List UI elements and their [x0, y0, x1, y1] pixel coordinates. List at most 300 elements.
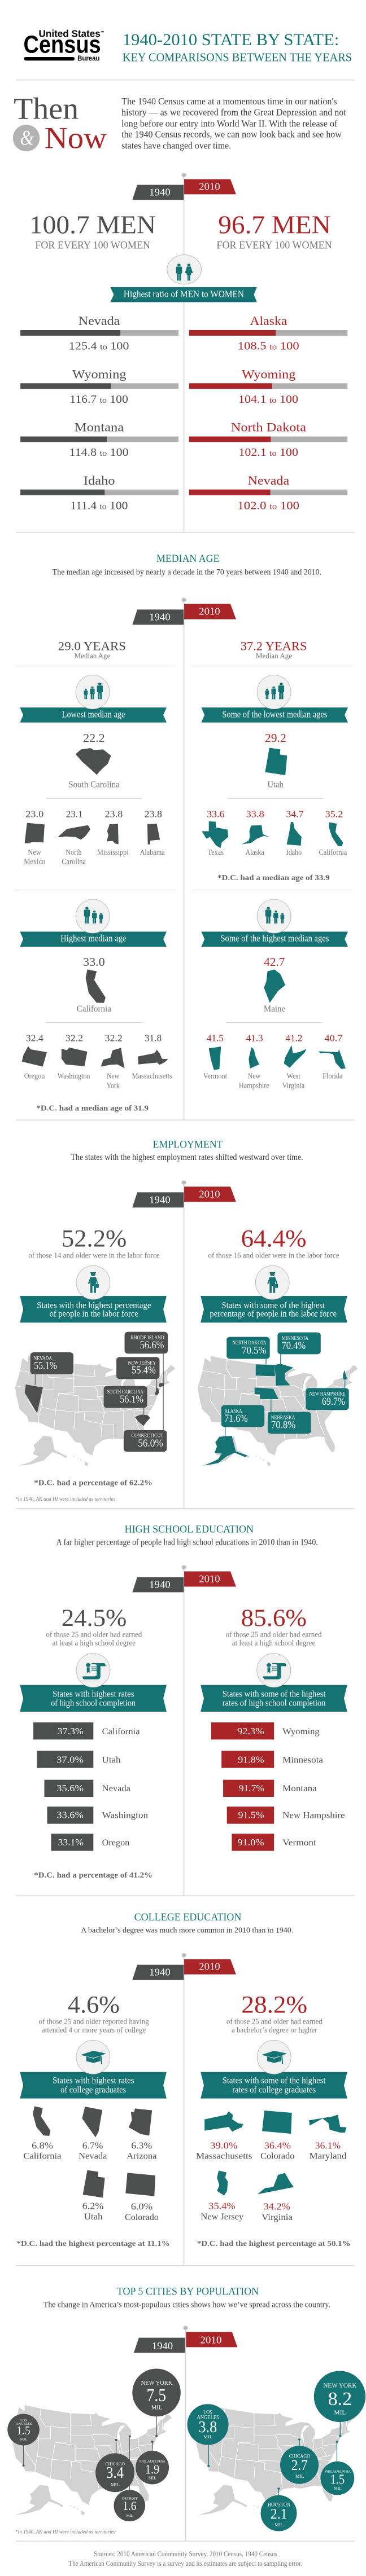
- bar rows 2010: Nevada: [248, 474, 289, 487]
- panel: lowest median age 2010: Texas: [208, 849, 224, 857]
- state grid 2010: Colorado: [260, 2151, 294, 2161]
- panel: lowest median age 2010: 29.2: [265, 732, 286, 745]
- ribbon: college 2010: [201, 2072, 347, 2099]
- section: median age: [15, 552, 352, 1120]
- callout: Rhode Island: [125, 1332, 168, 1353]
- bar rows 1940: 114.8 to 100: [69, 446, 129, 458]
- year flags: 1940: [149, 187, 171, 198]
- bar rows 1940: Montana: [75, 421, 124, 434]
- year flags: 2010: [199, 182, 220, 192]
- panel: highest median age 2010: New: [248, 1072, 260, 1080]
- ribbon: high school 1940: [20, 1685, 167, 1712]
- panel: highest median age 2010: Hampshire: [239, 1082, 269, 1090]
- callout: North Dakota: NORTH DAKOTA: [232, 1340, 267, 1346]
- bubble: Los Angeles 1.5: 1.5: [16, 2424, 30, 2437]
- bar list 2010: Wyoming: [282, 1727, 320, 1737]
- bar list 1940: Nevada: [102, 1784, 130, 1793]
- ribbon: college 2010: States with some of the highest: [223, 2076, 326, 2085]
- stat: 4.6%: 4.6%: [68, 1991, 120, 2018]
- icon: diploma 2010: [257, 1654, 291, 1687]
- panel: lowest median age 1940: Mexico: [24, 858, 45, 866]
- bar rows 1940: 125.4 to 100: [69, 340, 129, 352]
- Then & Now wordmark: [13, 93, 107, 155]
- bar list 2010: Vermont: [282, 1838, 316, 1848]
- callout: Minnesota: [277, 1333, 321, 1354]
- stat: 85.6%: at least a high school degree: [232, 1639, 316, 1647]
- bubble: Philadelphia 1.5: PHILADELPHIA: [324, 2469, 351, 2473]
- states: TX AK ID CA: [202, 821, 343, 848]
- panel: highest median age 2010: 41.5: [207, 1033, 224, 1044]
- bubble: Los Angeles 3.8: [187, 2404, 229, 2445]
- bubble: New York 8.2: [314, 2371, 365, 2422]
- ribbon: labor force 1940: of people in the labor force: [50, 1308, 138, 1318]
- Then & Now wordmark: Now: [45, 121, 107, 155]
- panel: lowest median age 2010: 34.7: [286, 809, 304, 820]
- state grid 1940: California: [24, 2151, 61, 2161]
- ribbon: highest median age: [20, 931, 167, 947]
- bubble: Houston 2.1: [260, 2495, 297, 2531]
- bubble: New York 7.5: NEW YORK: [141, 2379, 173, 2386]
- bar list 1940: 33.1%: [58, 1838, 84, 1848]
- bar list 1940: California: [102, 1727, 140, 1737]
- ribbon: labor force 2010: [201, 1296, 347, 1322]
- bubble: Philadelphia 1.5: 1.5: [330, 2472, 345, 2487]
- headline 1940: 100.7 men: FOR EVERY 100 WOMEN: [35, 239, 150, 251]
- icon: people ascending: [257, 675, 291, 709]
- state grid 2010: Maryland: [309, 2151, 347, 2161]
- panel: lowest median age 2010: 33.6: [207, 809, 225, 820]
- headline 2010: 96.7 men: FOR EVERY 100 WOMEN: [216, 239, 332, 251]
- stat: 64.4%: [208, 1224, 339, 1260]
- bar rows 2010: 102.0 to 100: [237, 499, 299, 512]
- heading: college education: COLLEGE EDUCATION: [134, 1911, 241, 1923]
- states: VT NH WV FL: [209, 1045, 346, 1070]
- ribbon: college 2010: rates of college graduates: [232, 2085, 316, 2095]
- ribbon: labor force 1940: [20, 1296, 167, 1322]
- state grid 1940: Nevada: [79, 2151, 107, 2161]
- section: employment: [15, 1138, 358, 1508]
- panel: lowest median age 1940: Mississippi: [97, 849, 129, 857]
- heading: college education: [81, 1911, 293, 1935]
- panel: highest median age 2010: 41.3: [246, 1033, 263, 1044]
- stat: 24.5%: of those 25 and older had earned: [46, 1631, 142, 1639]
- heading: employment: EMPLOYMENT: [152, 1138, 223, 1150]
- callout: Connecticut: 56.0%: [138, 1437, 163, 1449]
- footnote: territories: *In 1940, AK and HI were included as territories: [15, 2529, 115, 2535]
- bar list 1940: [33, 1722, 148, 1851]
- map: employment 1940: [15, 1332, 175, 1466]
- headline 2010: 96.7 men: 96.7 MEN: [218, 211, 331, 239]
- header: [24, 29, 352, 64]
- ribbon: high school 2010: [201, 1685, 347, 1712]
- footnote: territories: *In 1940, AK and HI were included as territories: [15, 1497, 115, 1502]
- panel: lowest median age 1940: 23.1: [66, 809, 83, 820]
- panel: lowest median age 2010: 35.2: [325, 809, 343, 820]
- year flags: 1940: [149, 1194, 171, 1206]
- state grid 1940: 6.8%: [32, 2140, 53, 2151]
- bar list 1940: 33.6%: [57, 1810, 84, 1821]
- intro paragraph: states have changed over time.: [121, 141, 231, 151]
- panel: lowest median age 1940: [20, 675, 167, 866]
- section: top 5 cities: [7, 2265, 365, 2568]
- logo: United States Census Bureau: [24, 29, 104, 63]
- Then & Now wordmark: Then: [14, 93, 79, 126]
- bar list 2010: Minnesota: [282, 1755, 323, 1765]
- map: cities 2010: [187, 2371, 365, 2531]
- ribbon: some of the highest: [201, 931, 348, 947]
- panel: lowest median age 1940: 23.0: [25, 809, 43, 820]
- panel: highest median age 1940: 31.8: [145, 1033, 162, 1044]
- callout: Rhode Island: RHODE ISLAND: [130, 1335, 164, 1341]
- callout: Minnesota: 70.4%: [281, 1339, 306, 1351]
- bubble: Detroit 1.6: MIL: [126, 2513, 133, 2518]
- panel: lowest median age 2010: Utah: [268, 780, 284, 789]
- bubble: New York 8.2: MIL: [334, 2409, 346, 2416]
- logo: United States Census Bureau: Census: [24, 31, 101, 58]
- stat: 28.2%: 28.2%: [241, 1991, 307, 2018]
- title: [123, 30, 352, 64]
- map: employment 2010: [198, 1333, 358, 1466]
- panel: highest median age 2010: Virginia: [282, 1082, 304, 1090]
- callout: South Carolina: SOUTH CAROLINA: [107, 1390, 143, 1395]
- panel: highest median age 2010: 40.7: [324, 1033, 343, 1044]
- stat: 29.0 years: 29.0 YEARS: [58, 639, 126, 653]
- state grid 1940: 6.7%: [82, 2140, 103, 2151]
- section: sex ratio: [20, 173, 347, 532]
- panel: lowest median age 2010: 33.8: [246, 809, 264, 820]
- callout: New Hampshire: 69.7%: [322, 1395, 345, 1407]
- note: D.C. employment: *D.C. had a percentage of 62.2%: [34, 1479, 152, 1487]
- stat: 85.6%: 85.6%: [241, 1604, 307, 1632]
- callout: North Dakota: [226, 1337, 270, 1359]
- state grid 1940: Colorado: [125, 2212, 159, 2222]
- state grid 2010: 36.1%: [315, 2140, 341, 2151]
- bubble: Chicago 2.7: CHICAGO: [289, 2454, 310, 2459]
- state grid 1940: 6.2%: [82, 2201, 103, 2212]
- Then & Now wordmark: &: [20, 126, 34, 150]
- panel: lowest median age 1940: Alabama: [140, 849, 165, 857]
- callout: New Hampshire: NEW HAMPSHIRE: [309, 1392, 345, 1397]
- icon: worker 2010: [255, 1265, 289, 1299]
- panel: highest median age 1940: 32.2: [66, 1033, 83, 1044]
- callout: South Carolina: [104, 1386, 147, 1408]
- bar list 2010: 91.0%: [237, 1838, 264, 1848]
- panel: highest median age 1940: New: [107, 1072, 119, 1080]
- headline 1940: 100.7 men: 100.7 MEN: [29, 211, 156, 239]
- bar list 2010: New Hampshire: [282, 1810, 345, 1820]
- bubble: Los Angeles 1.5: LOS: [20, 2419, 27, 2423]
- year flags: [132, 173, 236, 200]
- callout: Nevada: [30, 1352, 73, 1374]
- state grid 2010: Virginia: [262, 2212, 293, 2222]
- panel: lowest median age 2010: California: [319, 849, 347, 857]
- callout: Rhode Island: 56.6%: [140, 1339, 164, 1351]
- bubble: Detroit 1.6: [114, 2490, 145, 2521]
- panel: highest median age 1940: *D.C. had a median age of 31.9: [36, 1104, 149, 1113]
- callout: Nebraska: [268, 1412, 311, 1434]
- stat: 85.6%: [226, 1604, 322, 1647]
- year flags: 1940: [149, 1579, 171, 1590]
- panel: highest median age 2010: Maine: [264, 1004, 285, 1014]
- bubble: New York 8.2: 8.2: [328, 2388, 352, 2409]
- callout: Alaska: [221, 1405, 264, 1427]
- icon: people descending: [257, 899, 291, 933]
- panel: lowest median age 1940: North: [66, 849, 82, 857]
- state grid 1940: 6.3%: [131, 2140, 152, 2151]
- ribbon: highest median age: Highest median age: [60, 934, 126, 944]
- panel: lowest median age 1940: 23.8: [144, 809, 162, 820]
- year flags: [134, 2326, 237, 2353]
- year flags: 1940: [152, 2341, 173, 2352]
- state grid 2010: [196, 2111, 347, 2222]
- bubble: Los Angeles 1.5: MIL: [20, 2437, 28, 2441]
- state grid 2010: 35.4%: [208, 2201, 236, 2212]
- callout: New Jersey: 55.4%: [132, 1364, 156, 1376]
- stat: 64.4%: 64.4%: [241, 1224, 306, 1252]
- bar rows 1940: 116.7 to 100: [69, 393, 128, 405]
- intro paragraph: [121, 96, 346, 151]
- bubble: New York 7.5: [132, 2368, 181, 2416]
- ribbon: highest ratio: [110, 287, 257, 302]
- heading: median age: MEDIAN AGE: [156, 552, 219, 564]
- state grid 2010: Massachusetts: [196, 2151, 252, 2161]
- ribbon: college 1940: States with highest rates: [53, 2076, 134, 2085]
- state grid 2010: 39.0%: [210, 2140, 237, 2151]
- ribbon: high school 2010: States with some of the highest: [223, 1689, 326, 1699]
- year flags: 2010: [199, 1962, 220, 1972]
- state: California: [86, 969, 106, 1003]
- bar list 1940: Washington: [102, 1810, 148, 1820]
- map: cities 1940: [7, 2368, 181, 2521]
- callout: Nebraska: NEBRASKA: [271, 1416, 295, 1421]
- callout: North Dakota: 70.5%: [242, 1344, 266, 1356]
- year flags: [132, 1565, 236, 1592]
- callout: Nebraska: 70.8%: [271, 1419, 295, 1431]
- bar rows 1940: Nevada: [79, 314, 120, 328]
- stat: 24.5%: at least a high school degree: [53, 1639, 136, 1647]
- panel: lowest median age 2010: Idaho: [286, 849, 302, 857]
- panel: lowest median age 1940: 22.2: [83, 732, 105, 745]
- heading: college education: A bachelor’s degree was much more common in 2010 than in 1940.: [81, 1926, 293, 1935]
- panel: highest median age 1940: York: [107, 1082, 120, 1090]
- panel: lowest median age 1940: New: [28, 849, 41, 857]
- state: South Carolina: [76, 748, 111, 775]
- year flags: 1940: [149, 612, 171, 623]
- bubble: Los Angeles 3.8: MIL: [203, 2435, 213, 2440]
- icon: worker 1940: [76, 1265, 110, 1299]
- callout: Alaska: 71.6%: [224, 1412, 248, 1424]
- footer: sources: [68, 2550, 302, 2568]
- bar list 1940: Oregon: [102, 1838, 130, 1848]
- bar rows 1940: [20, 314, 178, 512]
- section: college education: [16, 1911, 351, 2266]
- bubble: Los Angeles 1.5: ANGELES: [16, 2423, 32, 2426]
- heading: employment: [71, 1138, 303, 1162]
- heading: high school education: HIGH SCHOOL EDUCATION: [125, 1523, 254, 1535]
- bubble: Philadelphia 1.5: [320, 2461, 354, 2495]
- bar list 2010: [211, 1722, 345, 1851]
- bar rows 2010: 104.1 to 100: [238, 393, 298, 405]
- bubble: Chicago 3.4: 3.4: [106, 2463, 124, 2481]
- panel: highest median age 2010: 41.2: [286, 1033, 302, 1044]
- bubble: Detroit 1.6: 1.6: [123, 2500, 136, 2513]
- callout: Alaska: ALASKA: [225, 1409, 242, 1414]
- state grid 1940: [24, 2106, 159, 2222]
- year flags: [132, 598, 236, 625]
- stat: 52.2%: of those 14 and older were in the labor force: [28, 1252, 160, 1260]
- state grid 1940: Arizona: [127, 2151, 156, 2161]
- bubble: Philadelphia 1.9: [136, 2451, 169, 2484]
- panel: highest median age 1940: [20, 899, 172, 1113]
- stat: 85.6%: of those 25 and older had earned: [226, 1631, 322, 1639]
- panel: highest median age 1940: Washington: [58, 1072, 90, 1080]
- bubble: Philadelphia 1.9: MIL: [149, 2476, 156, 2480]
- panel: highest median age 1940: Oregon: [24, 1072, 45, 1080]
- callout: New Jersey: NEW JERSEY: [128, 1361, 156, 1366]
- heading: high school education: [56, 1523, 318, 1547]
- note: D.C. high school: *D.C. had a percentage of 41.2%: [34, 1871, 152, 1880]
- state grid 1940: Utah: [84, 2212, 103, 2222]
- bubble: Houston 2.1: HOUSTON: [268, 2502, 290, 2508]
- ribbon: highest ratio: Highest ratio of MEN to WOMEN: [124, 289, 244, 300]
- section: high school education: [20, 1523, 347, 1896]
- state grid 2010: New Jersey: [201, 2212, 243, 2222]
- bubble: Los Angeles 3.8: LOS: [203, 2410, 212, 2415]
- logo: United States Census Bureau: United States: [39, 29, 101, 39]
- bubble: Los Angeles 1.5: [7, 2414, 40, 2446]
- states: NM NC MS AL: [25, 823, 160, 845]
- bubble: Chicago 2.7: [280, 2446, 319, 2484]
- bubble: Chicago 2.7: MIL: [295, 2474, 304, 2480]
- panel: highest median age 1940: California: [77, 1004, 111, 1014]
- stat: 4.6%: attended 4 or more years of college: [42, 2026, 146, 2034]
- panel: lowest median age 1940: Carolina: [62, 858, 86, 866]
- stat: 52.2%: [28, 1224, 160, 1260]
- bar list 2010: 92.3%: [237, 1726, 264, 1737]
- bar list 1940: 35.6%: [56, 1783, 84, 1793]
- heading: top 5 cities: [43, 2286, 330, 2309]
- states: OR WA NY MA: [22, 1046, 168, 1068]
- ribbon: lowest median age: Lowest median age: [62, 710, 125, 720]
- ribbon: high school 1940: States with highest rates: [53, 1689, 134, 1699]
- stat: 52.2%: 52.2%: [62, 1224, 127, 1252]
- logo: United States Census Bureau: TM: [101, 30, 104, 33]
- bar list 1940: 37.3%: [58, 1726, 84, 1737]
- headline 1940: 100.7 men: [29, 211, 156, 251]
- panel: highest median age 1940: 32.2: [105, 1033, 123, 1044]
- bubble: Los Angeles 3.8: ANGELES: [197, 2415, 219, 2421]
- stat: 37.2 years: [241, 639, 307, 660]
- callout: New Jersey: [116, 1357, 159, 1379]
- bubble: New York 7.5: 7.5: [147, 2385, 166, 2405]
- highlighted states 1940: [25, 1383, 164, 1426]
- callout: Connecticut: [124, 1430, 167, 1452]
- stat: 28.2%: a bachelor’s degree or higher: [232, 2026, 317, 2034]
- ribbon: high school 1940: of high school completion: [51, 1698, 136, 1708]
- panel: lowest median age 2010: *D.C. had a median age of 33.9: [217, 873, 330, 882]
- callout: Nevada: 55.1%: [34, 1360, 57, 1371]
- stat: 37.2 years: 37.2 YEARS: [241, 639, 307, 653]
- panel: highest median age 2010: West: [287, 1072, 300, 1080]
- ribbon: college 1940: [20, 2072, 167, 2099]
- icon: graduation cap 2010: [257, 2040, 291, 2074]
- panel: highest median age 1940: 32.4: [26, 1033, 43, 1044]
- stat: 4.6%: [39, 1991, 149, 2034]
- bar rows 1940: 111.4 to 100: [70, 499, 128, 512]
- icon: graduation cap 1940: [76, 2040, 110, 2074]
- bar rows 2010: Wyoming: [242, 368, 295, 381]
- panel: highest median age 1940: Massachusetts: [132, 1072, 172, 1080]
- stat: 4.6%: of those 25 and older reported having: [39, 2018, 149, 2026]
- year flags: 2010: [199, 1189, 220, 1200]
- bar rows 2010: Alaska: [250, 314, 287, 328]
- panel: highest median age 2010: Florida: [323, 1072, 343, 1080]
- year flags: 2010: [199, 1573, 220, 1585]
- stat: 24.5%: [46, 1604, 142, 1647]
- bubble: Houston 2.1: 2.1: [271, 2506, 287, 2522]
- ribbon: some of the lowest: [201, 707, 348, 723]
- icon: people ascending: [76, 675, 110, 709]
- bubble: Houston 2.1: MIL: [274, 2522, 284, 2528]
- bubble: Philadelphia 1.9: 1.9: [145, 2462, 159, 2477]
- bubble: Chicago 3.4: MIL: [111, 2482, 120, 2487]
- ribbon: labor force 1940: States with the highest percentage: [37, 1300, 151, 1310]
- logo: United States Census Bureau: Bureau: [77, 55, 100, 63]
- heading: top 5 cities: TOP 5 CITIES BY POPULATION: [117, 2286, 259, 2297]
- headline 2010: 96.7 men: [216, 211, 332, 251]
- icon: people descending: [76, 899, 110, 933]
- ribbon: labor force 2010: States with some of the highest: [222, 1300, 325, 1310]
- bubble: Los Angeles 3.8: 3.8: [198, 2418, 217, 2436]
- bar rows 2010: 108.5 to 100: [238, 340, 299, 352]
- panel: lowest median age 2010: [201, 675, 348, 882]
- bar rows 1940: Wyoming: [72, 368, 126, 381]
- bubble: Philadelphia 1.5: MIL: [334, 2486, 342, 2491]
- bar list 2010: Montana: [282, 1784, 317, 1793]
- bar list 2010: 91.7%: [239, 1783, 264, 1793]
- stat: 28.2%: [226, 1991, 323, 2034]
- bubble: Philadelphia 1.9: PHILADELPHIA: [140, 2459, 165, 2463]
- bubble: Chicago 3.4: CHICAGO: [106, 2462, 125, 2467]
- note: D.C. college 1940: *D.C. had the highest percentage at 11.1%: [16, 2239, 170, 2248]
- footer: sources: The American Community Survey is a survey and its estimates are subject to sampling error.: [68, 2560, 302, 2568]
- stat: 37.2 years: Median Age: [256, 652, 292, 660]
- bar list 1940: 37.0%: [56, 1755, 84, 1765]
- panel: lowest median age 1940: 23.8: [105, 809, 123, 820]
- state grid 1940: 6.0%: [131, 2202, 152, 2212]
- highlighted states 2010: [204, 1364, 347, 1466]
- footer: sources: Sources: 2010 American Community Survey, 2010 Census, 1940 Census: [94, 2550, 277, 2558]
- year flags: [132, 1180, 236, 1207]
- bubble: Chicago 3.4: [95, 2453, 134, 2492]
- panel: highest median age 1940: 33.0: [83, 956, 105, 969]
- stat: 24.5%: 24.5%: [62, 1604, 127, 1632]
- bar rows 2010: North Dakota: [231, 421, 306, 434]
- bubble: Chicago 2.7: 2.7: [291, 2458, 308, 2474]
- bubble: New York 7.5: MIL: [151, 2404, 162, 2411]
- callout: Nevada: NEVADA: [33, 1356, 53, 1361]
- panel: highest median age 2010: [201, 899, 348, 1090]
- state: Maine: [264, 969, 285, 1003]
- year flags: 1940: [149, 1967, 171, 1978]
- bar rows 1940: Idaho: [84, 474, 115, 487]
- panel: highest median age 2010: Vermont: [203, 1072, 228, 1080]
- bar list 1940: Utah: [102, 1755, 121, 1765]
- stat: 29.0 years: Median Age: [75, 652, 110, 660]
- year flags: [132, 1953, 236, 1980]
- bar rows 2010: 102.1 to 100: [238, 446, 298, 458]
- year flags: 2010: [199, 606, 220, 617]
